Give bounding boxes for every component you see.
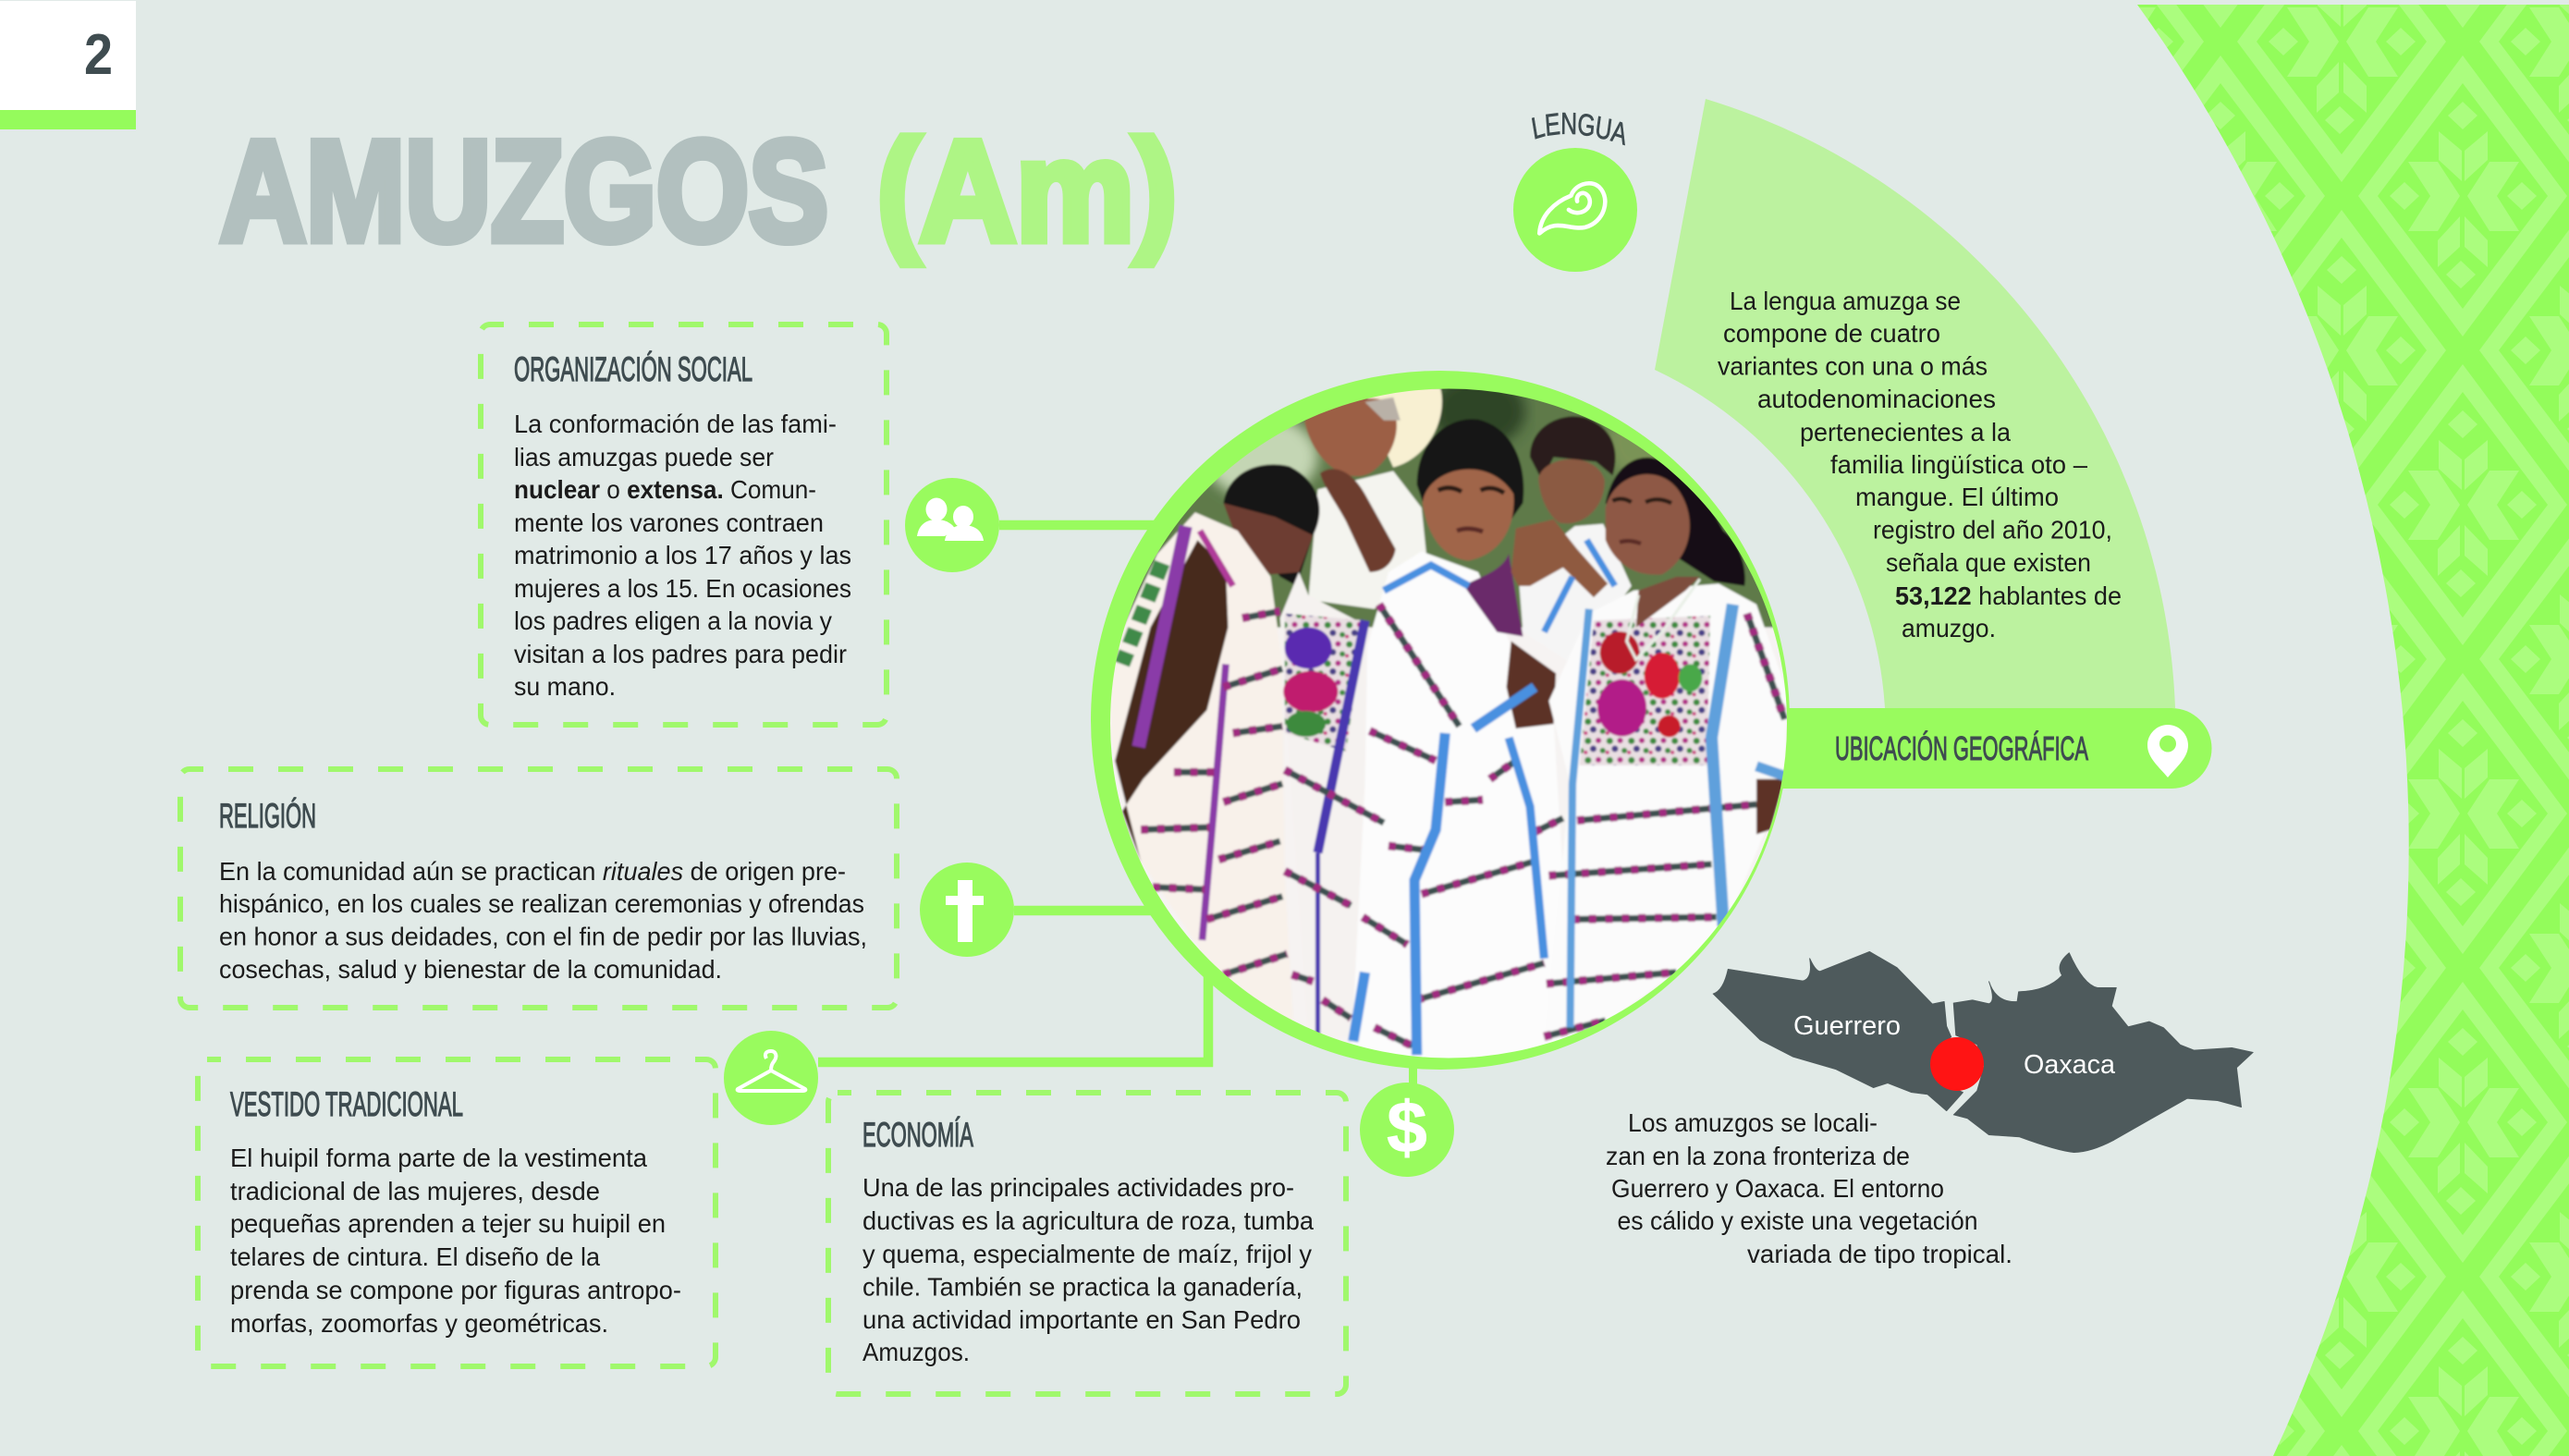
heading: economía: ECONOMÍA	[862, 1116, 973, 1154]
heading: vestido tradicional: VESTIDO TRADICIONAL	[230, 1085, 463, 1123]
lengua text: autodenominaciones	[1757, 385, 1996, 413]
child	[1530, 416, 1616, 480]
body: religión: En la comunidad aún se practican rituales de origen pre-	[219, 857, 846, 886]
body: economía: Una de las principales actividades pro-	[862, 1173, 1294, 1202]
body: economía	[862, 1173, 1314, 1366]
panel: ubicación geográfica bar: UBICACIÓN GEOGRÁFICA	[1835, 729, 2088, 767]
body: organización social: La conformación de las fami-	[514, 410, 837, 438]
icon: dollar	[1360, 1083, 1454, 1177]
page number tab: 2	[84, 23, 113, 87]
body: religión: cosechas, salud y bienestar de la comunidad.	[219, 955, 722, 984]
body: organización social: visitan a los padres para pedir	[514, 640, 847, 668]
location text	[1606, 1108, 2012, 1268]
embroidered bands	[1141, 605, 1785, 1046]
location text: Los amuzgos se locali-	[1628, 1108, 1878, 1137]
title: AMUZGOS	[220, 111, 828, 271]
body: organización social: mujeres a los 15. En ocasiones	[514, 574, 851, 603]
body: vestido tradicional: pequeñas aprenden a tejer su huipil en	[230, 1209, 666, 1238]
title: )	[1134, 113, 1177, 265]
body: economía: chile. También se practica la ganadería,	[862, 1272, 1303, 1302]
heading: organización social: ORGANIZACIÓN SOCIAL	[514, 350, 752, 388]
title: Am	[920, 111, 1134, 271]
lengua text: registro del año 2010,	[1873, 516, 2112, 544]
body: vestido tradicional: telares de cintura. El diseño de la	[230, 1242, 600, 1271]
icon: lengua swirl	[1513, 148, 1637, 272]
left shawl figure	[1124, 510, 1279, 629]
body: organización social: matrimonio a los 17 años y las	[514, 541, 851, 569]
location text: variada de tipo tropical.	[1747, 1240, 2012, 1268]
body: economía: ductivas es la agricultura de roza, tumba	[862, 1206, 1314, 1235]
body: religión: hispánico, en los cuales se realizan ceremonias y ofrendas	[219, 889, 864, 918]
body: religión: en honor a sus deidades, con el fin de pedir por las lluvias,	[219, 923, 867, 950]
right woman head	[1606, 458, 1745, 586]
lengua text: La lengua amuzga se	[1730, 287, 1961, 315]
body: vestido tradicional	[230, 1144, 681, 1338]
body: economía: Amuzgos.	[862, 1338, 970, 1366]
lengua text: amuzgo.	[1902, 614, 1996, 642]
page number tab	[0, 1, 136, 129]
body: organización social: lias amuzgas puede ser	[514, 443, 774, 471]
location text: zan en la zona fronteriza de	[1606, 1142, 1910, 1170]
location text: es cálido y existe una vegetación	[1618, 1206, 1978, 1235]
body: vestido tradicional: prenda se compone por figuras antropo-	[230, 1276, 681, 1304]
lengua text: pertenecientes a la	[1800, 418, 2011, 447]
photo: women in huipiles	[1063, 370, 1803, 1091]
right woman huipil	[1544, 583, 1787, 1046]
body: organización social: los padres eligen a la novia y	[514, 606, 832, 635]
body: organización social: nuclear o extensa. Comun-	[514, 475, 816, 504]
map: Guerrero and Oaxaca: Guerrero	[1793, 1011, 1901, 1041]
centre woman huipil	[1351, 552, 1563, 1059]
lengua text: familia lingüística oto –	[1830, 450, 2087, 479]
lengua text: variantes con una o más	[1718, 351, 1988, 381]
panel: organización social	[481, 324, 887, 725]
heading: religión: RELIGIÓN	[219, 797, 316, 835]
map: Guerrero and Oaxaca: Oaxaca	[2024, 1050, 2116, 1080]
woman back left	[1223, 464, 1319, 586]
panel: religión	[180, 769, 897, 1008]
icon: people	[905, 478, 999, 572]
map: Guerrero and Oaxaca	[1713, 951, 2253, 1153]
icon: dollar: $	[1387, 1086, 1427, 1168]
lengua text: señala que existen	[1886, 548, 2091, 577]
body: economía: una actividad importante en San Pedro	[862, 1305, 1301, 1334]
body: vestido tradicional: tradicional de las mujeres, desde	[230, 1177, 600, 1205]
textile pattern band	[2137, 5, 2569, 1456]
body: organización social: su mano.	[514, 672, 616, 701]
panel: lengua wedge	[1655, 99, 2175, 708]
location text: Guerrero y Oaxaca. El entorno	[1611, 1174, 1944, 1203]
body: organización social: mente los varones contraen	[514, 508, 824, 537]
panel: ubicación geográfica bar	[1756, 708, 2211, 789]
lengua text: mangue. El último	[1855, 483, 2059, 511]
blue bands	[1353, 565, 1787, 1055]
lengua text: compone de cuatro	[1723, 319, 1940, 348]
hat and man	[1365, 388, 1442, 467]
body: economía: y quema, especialmente de maíz, frijol y	[862, 1240, 1312, 1268]
centre woman head	[1417, 419, 1523, 526]
icon: hanger	[724, 1031, 818, 1125]
panel: economía	[828, 1093, 1346, 1394]
body: vestido tradicional: El huipil forma parte de la vestimenta	[230, 1144, 647, 1172]
lengua label: LENGUA	[1531, 113, 1625, 146]
body: religión	[219, 857, 867, 984]
title: (	[877, 113, 921, 265]
lengua text	[1718, 287, 2122, 642]
icon: cross	[920, 863, 1014, 957]
body: vestido tradicional: morfas, zoomorfas y geométricas.	[230, 1309, 608, 1338]
lengua text: 53,122 hablantes de	[1895, 581, 2122, 610]
connector lines	[818, 525, 1413, 1091]
panel: vestido tradicional	[198, 1059, 716, 1366]
body: organización social	[514, 410, 851, 701]
